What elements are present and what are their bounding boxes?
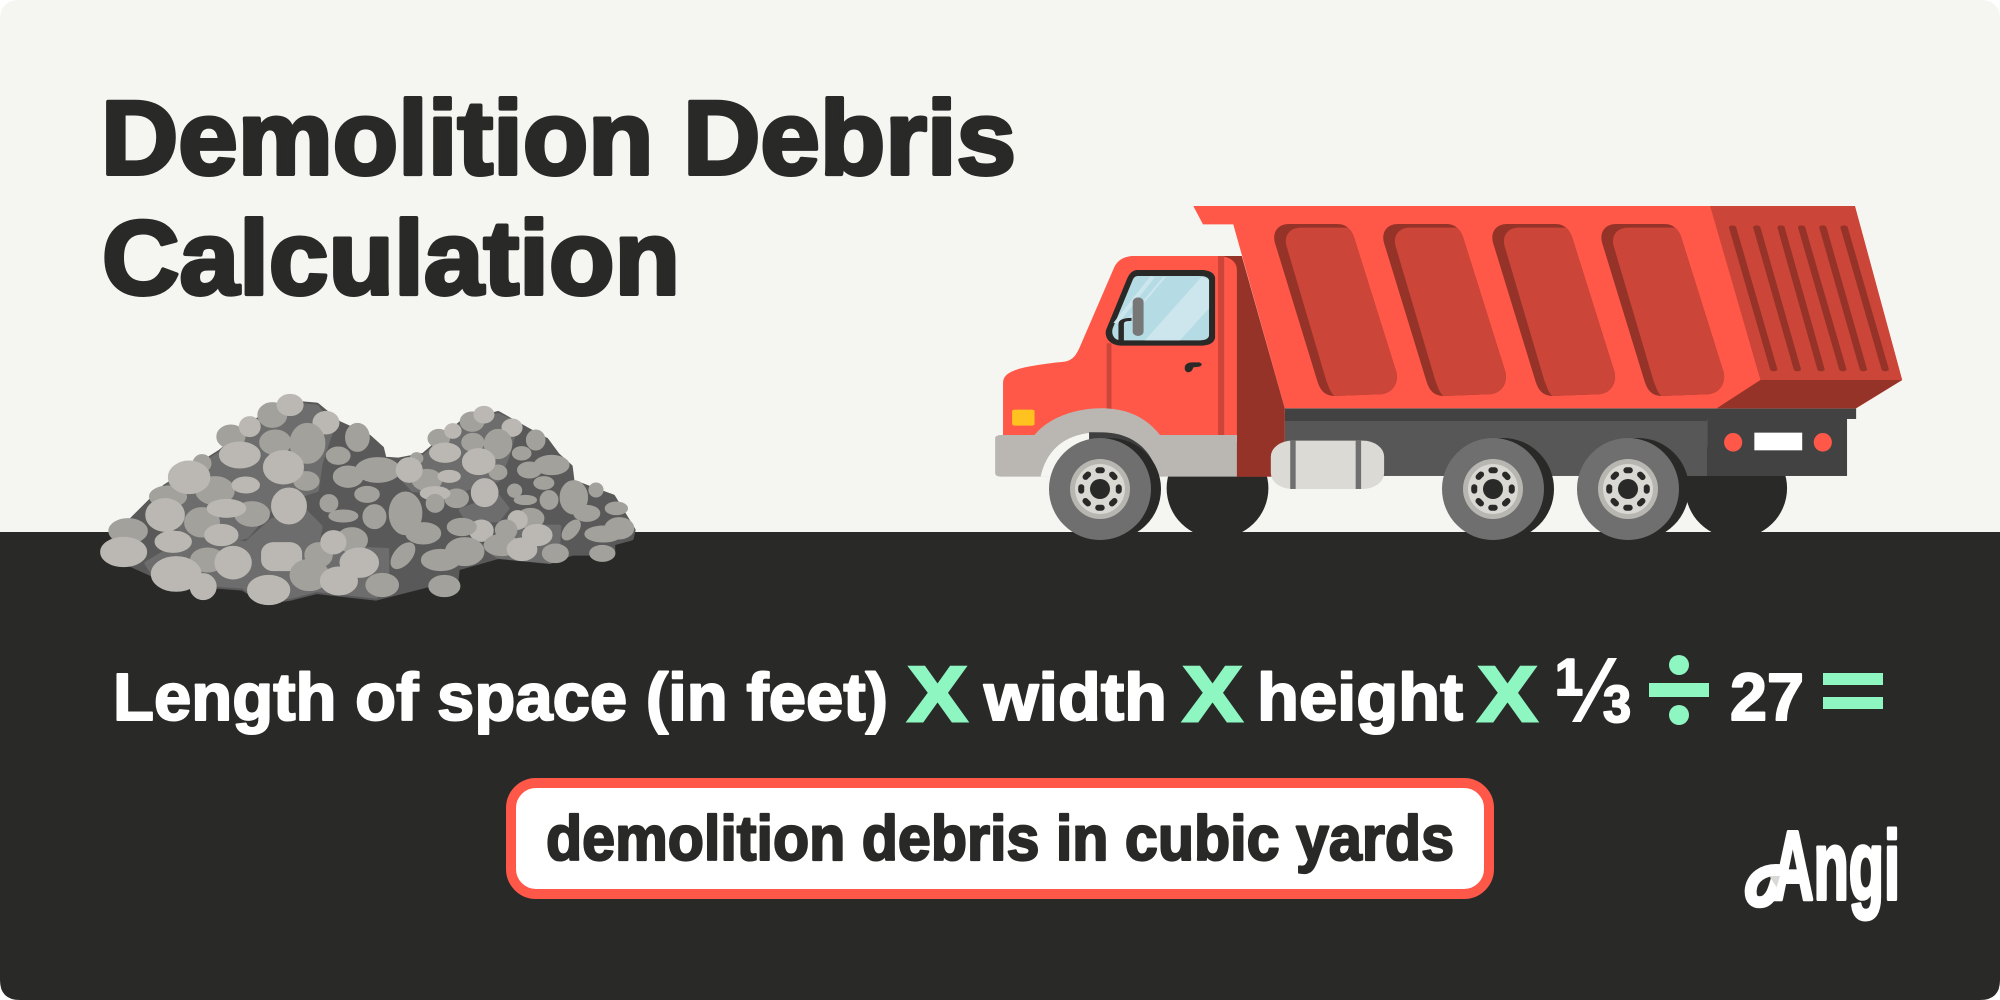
multiply sign 2: X [1183, 650, 1242, 738]
front wheel [1049, 438, 1161, 540]
formula term: length: Length of space (in feet) [113, 660, 888, 735]
illustration: dump truck [995, 206, 1902, 540]
divide sign [1649, 655, 1709, 725]
multiply sign 3: X [1478, 650, 1537, 738]
number 27: 27 [1730, 660, 1804, 735]
fraction one third: 3 [1603, 676, 1631, 734]
panel: light upper background [0, 0, 2000, 532]
last rear wheel [1577, 438, 1689, 540]
illustration: debris pile [101, 395, 633, 604]
fraction one third [1555, 649, 1631, 734]
title: Demolition Debris [101, 80, 1016, 197]
truck body and bed [995, 206, 1902, 538]
multiply sign 1: X [908, 650, 967, 738]
equals sign [1823, 673, 1883, 709]
logo: Angi: Angi [1772, 811, 1900, 920]
middle rear wheel [1442, 438, 1554, 540]
logo: Angi [1751, 811, 1900, 920]
title: Calculation [102, 200, 680, 317]
title [101, 80, 1016, 317]
formula [113, 649, 1883, 738]
panel: dark lower background [0, 532, 2000, 1000]
result callout: demolition debris in cubic yards [546, 804, 1454, 874]
result callout [511, 783, 1489, 894]
formula term: height: height [1257, 660, 1463, 735]
formula term: width: width [983, 660, 1167, 735]
fraction one third: 1 [1555, 649, 1583, 707]
